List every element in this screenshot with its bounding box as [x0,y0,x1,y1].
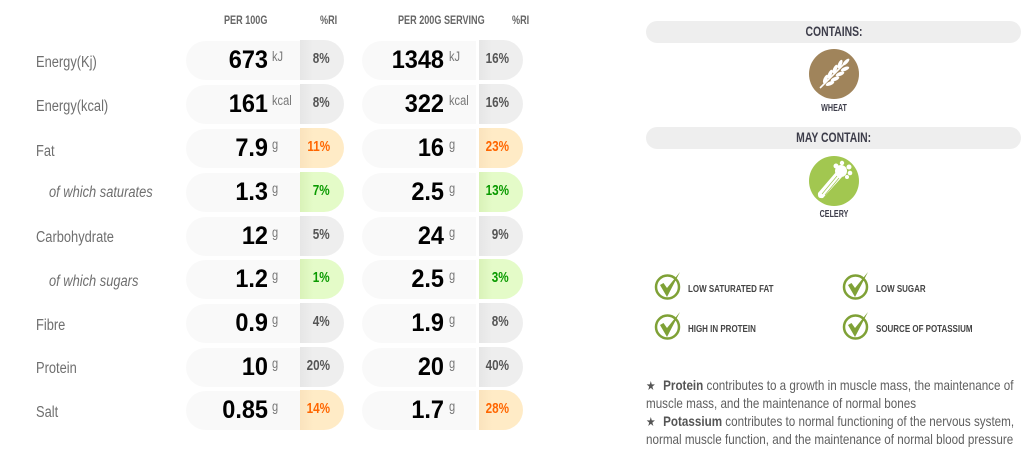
heading bar: contains [646,21,1021,43]
row: energy kcal: kcal [449,93,469,108]
row: salt: Salt [36,404,58,421]
row: saturates: 1.3 [235,178,268,206]
row: carbohydrate: g [449,225,455,240]
heading bar: may contain [646,127,1021,149]
row: protein: Protein [36,360,77,377]
row: energy kJ: kJ [272,49,283,64]
row: fat: 7.9 [235,134,268,162]
row: carbohydrate: g [272,225,278,240]
row: protein: 20% [307,357,330,374]
row: carbohydrate: 5% [313,226,330,243]
row: fibre: g [449,312,455,327]
text block: protein and potassium notes: muscle mass, and the maintenance of normal bones [646,396,916,411]
claim: source of potassium: SOURCE OF POTASSIUM [876,323,973,335]
row: energy kcal: 322 [404,90,444,118]
row: saturates: g [272,181,278,196]
row: fat: 11% [307,138,330,155]
row: protein: 20 [417,353,444,381]
text block: protein and potassium notes [646,378,1014,447]
row: fat: 16 [417,134,444,162]
row: saturates: of which saturates [49,184,153,201]
row: energy kcal [36,84,523,124]
text block: protein and potassium notes: Protein contributes to a growth in muscle mass, the maintenance of [663,378,1013,393]
row: carbohydrate: Carbohydrate [36,229,114,246]
row: salt: 14% [307,400,330,417]
row: sugars: g [449,268,455,283]
icon: celery [809,156,859,206]
icon: wheat [809,49,859,99]
row: saturates: g [449,181,455,196]
row: saturates [49,172,523,212]
text block: protein and potassium notes: ★ [646,414,656,429]
heading bar: contains: CONTAINS: [805,24,862,39]
row: energy kJ [36,40,523,80]
heading: %RI serving: %RI [512,15,529,27]
row: fibre: 0.9 [235,309,268,337]
claim: low saturated fat [654,272,774,300]
row: sugars: g [272,268,278,283]
row: carbohydrate: 24 [417,222,444,250]
claim: high in protein: HIGH IN PROTEIN [688,323,756,335]
row: carbohydrate: 12 [241,222,268,250]
row: saturates: 2.5 [411,178,444,206]
row: sugars: of which sugars [49,273,138,290]
heading: %RI 100g: %RI [320,15,337,27]
text block: protein and potassium notes: normal muscle function, and the maintenance of normal blood pressure [646,432,1013,447]
row: fat: 23% [486,138,509,155]
row: carbohydrate: 9% [492,226,509,243]
claim: low sugar [842,272,926,300]
row: energy kJ: 1348 [391,46,444,74]
claim: source of potassium [842,312,973,340]
caption: celery: CELERY [820,208,848,220]
row: fat [36,128,523,168]
row: protein: 10 [241,353,268,381]
row: energy kJ: 8% [313,50,330,67]
row: energy kJ: kJ [449,49,460,64]
caption: wheat: WHEAT [821,102,847,114]
row: fibre: 8% [492,313,509,330]
row: sugars: 3% [492,269,509,286]
row: protein: g [449,356,455,371]
row: salt: g [449,399,455,414]
claim: low sugar: LOW SUGAR [876,283,926,295]
row: salt: 28% [486,400,509,417]
row: salt: g [272,399,278,414]
row: fibre [36,303,523,343]
row: protein: g [272,356,278,371]
row: energy kcal: 8% [313,94,330,111]
row: sugars: 1.2 [235,265,268,293]
row: energy kcal: 16% [486,94,509,111]
text block: protein and potassium notes: Potassium contributes to normal functioning of the nervous system, [663,414,1014,429]
row: energy kcal: Energy(kcal) [36,98,108,115]
row: fat: g [272,137,278,152]
row: protein: 40% [486,357,509,374]
row: fibre: g [272,312,278,327]
text block: protein and potassium notes: ★ [646,378,656,393]
row: salt: 1.7 [411,396,444,424]
row: salt: 0.85 [222,396,268,424]
row: fat: g [449,137,455,152]
row: protein [36,347,523,387]
row: fibre: Fibre [36,317,65,334]
heading: per 200g serving: PER 200G SERVING [398,15,485,27]
claim: high in protein [654,312,756,340]
heading: per 100g: PER 100G [224,15,267,27]
row: saturates: 13% [486,182,509,199]
heading bar: may contain: MAY CONTAIN: [796,130,871,145]
row: carbohydrate [36,216,523,256]
row: saturates: 7% [313,182,330,199]
row: energy kJ: 16% [486,50,509,67]
row: fibre: 1.9 [411,309,444,337]
row: fat: Fat [36,143,55,160]
row: energy kJ: 673 [228,46,268,74]
row: sugars: 2.5 [411,265,444,293]
row: energy kcal: 161 [228,90,268,118]
row: sugars: 1% [313,269,330,286]
row: fibre: 4% [313,313,330,330]
claim: low saturated fat: LOW SATURATED FAT [688,283,774,295]
row: sugars [49,259,523,299]
row: energy kcal: kcal [272,93,292,108]
row: salt [36,390,523,430]
row: energy kJ: Energy(Kj) [36,54,97,71]
